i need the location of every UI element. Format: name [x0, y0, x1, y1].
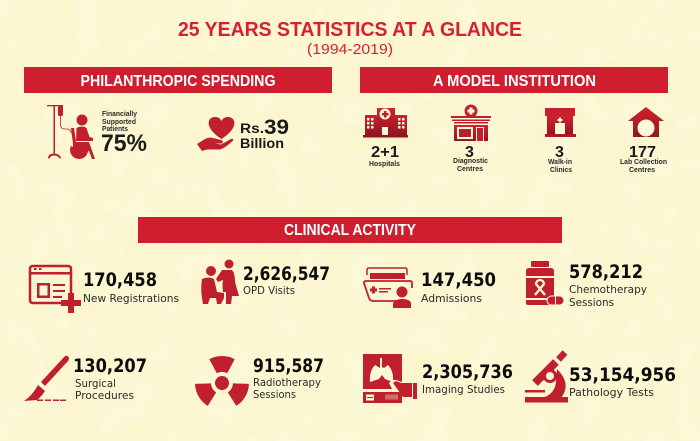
- icon: OPD visits: [201, 260, 239, 304]
- panel: philanthropic spending heading: PHILANTHROPIC SPENDING: [80, 73, 276, 90]
- icon: chemotherapy bottle: [526, 261, 564, 305]
- text: 177 lab collection centres: Lab Collection: [620, 159, 667, 166]
- icon: imaging studies: [363, 354, 417, 403]
- text: 3 walk-in clinics: [548, 144, 572, 174]
- text: 3 walk-in clinics: 3: [555, 144, 564, 161]
- text: financially supported patients 75%: Patients: [102, 126, 128, 133]
- text: 2+1 hospitals: Hospitals: [369, 161, 400, 168]
- stat: new registrations: 170,458: [83, 269, 157, 291]
- icon: admissions: [364, 268, 412, 308]
- stat: chemotherapy sessions: [569, 261, 647, 309]
- text: 3 diagnostic centres: Centres: [457, 166, 483, 173]
- stat: radiotherapy sessions: Sessions: [253, 388, 296, 401]
- text: 3 diagnostic centres: 3: [465, 144, 474, 161]
- stat: radiotherapy sessions: [253, 355, 324, 401]
- subtitle: date range: (1994-2019): [307, 42, 393, 58]
- icon: microscope: [525, 352, 568, 402]
- stat: pathology tests: [569, 364, 676, 399]
- panel: clinical activity heading: [138, 217, 562, 243]
- stat: chemotherapy sessions: Chemotherapy: [569, 283, 647, 296]
- stat: admissions: Admissions: [421, 292, 482, 305]
- icon: diagnostic centre: [451, 104, 491, 141]
- stat: surgical procedures: Procedures: [75, 389, 134, 402]
- stat: new registrations: [83, 269, 179, 305]
- stat: admissions: 147,450: [421, 269, 496, 291]
- icon: scalpel: [24, 356, 69, 401]
- stat: radiotherapy sessions: 915,587: [253, 355, 324, 377]
- text: 177 lab collection centres: 177: [629, 144, 656, 161]
- stat: radiotherapy sessions: Radiotherapy: [253, 376, 321, 389]
- panel: model institution heading: A MODEL INSTITUTION: [433, 73, 596, 90]
- text: Rs. 39 billion: [240, 115, 289, 151]
- stat: admissions: [421, 269, 496, 305]
- text: 3 diagnostic centres: [453, 144, 488, 173]
- stat: chemotherapy sessions: Sessions: [569, 296, 614, 309]
- stat: surgical procedures: Surgical: [75, 377, 116, 390]
- text: financially supported patients 75%: [101, 111, 147, 157]
- text: financially supported patients 75%: Supported: [102, 119, 136, 126]
- stat: surgical procedures: 130,207: [73, 355, 147, 377]
- panel: clinical activity heading: CLINICAL ACTIVITY: [284, 222, 416, 239]
- text: financially supported patients 75%: Financially: [102, 111, 137, 118]
- stat: imaging studies: Imaging Studies: [422, 383, 505, 396]
- stat: new registrations: New Registrations: [83, 292, 179, 305]
- icon: lab collection centre: [628, 107, 664, 137]
- icon: walk-in clinic: [545, 108, 576, 137]
- text: 3 diagnostic centres: Diagnostic: [453, 158, 488, 165]
- icon: patient in wheelchair with drip: [47, 105, 95, 159]
- icon: hospital: [363, 108, 408, 138]
- text: 2+1 hospitals: 2+1: [371, 144, 399, 161]
- panel: philanthropic spending heading: [24, 67, 332, 93]
- text: 177 lab collection centres: [620, 144, 667, 174]
- icon: heart in hand: [197, 117, 234, 151]
- text: 3 walk-in clinics: Walk-in: [548, 159, 572, 166]
- title: 25 YEARS STATISTICS AT A GLANCE: [178, 19, 522, 41]
- text: 177 lab collection centres: Centres: [629, 167, 655, 174]
- text: Rs. 39 billion: Billion: [240, 136, 284, 151]
- stat: OPD visits: 2,626,547: [243, 263, 330, 285]
- stat: OPD visits: OPD Visits: [243, 284, 295, 297]
- stat: imaging studies: [422, 361, 513, 396]
- icon: new registrations: [30, 266, 81, 313]
- text: financially supported patients 75%: 75%: [101, 130, 147, 157]
- text: 2+1 hospitals: [369, 144, 400, 168]
- stat: pathology tests: 53,154,956: [569, 364, 676, 386]
- text: 3 walk-in clinics: Clinics: [550, 167, 572, 174]
- stat: pathology tests: Pathology Tests: [569, 386, 654, 399]
- stat: OPD visits: [243, 263, 330, 297]
- stat: imaging studies: 2,305,736: [422, 361, 513, 383]
- icon: radiation symbol: [192, 356, 252, 407]
- text: Rs. 39 billion: 39: [264, 115, 289, 139]
- stat: surgical procedures: [73, 355, 147, 402]
- stat: chemotherapy sessions: 578,212: [569, 261, 643, 283]
- text: Rs. 39 billion: Rs.: [240, 121, 264, 136]
- panel: model institution heading: [360, 67, 668, 93]
